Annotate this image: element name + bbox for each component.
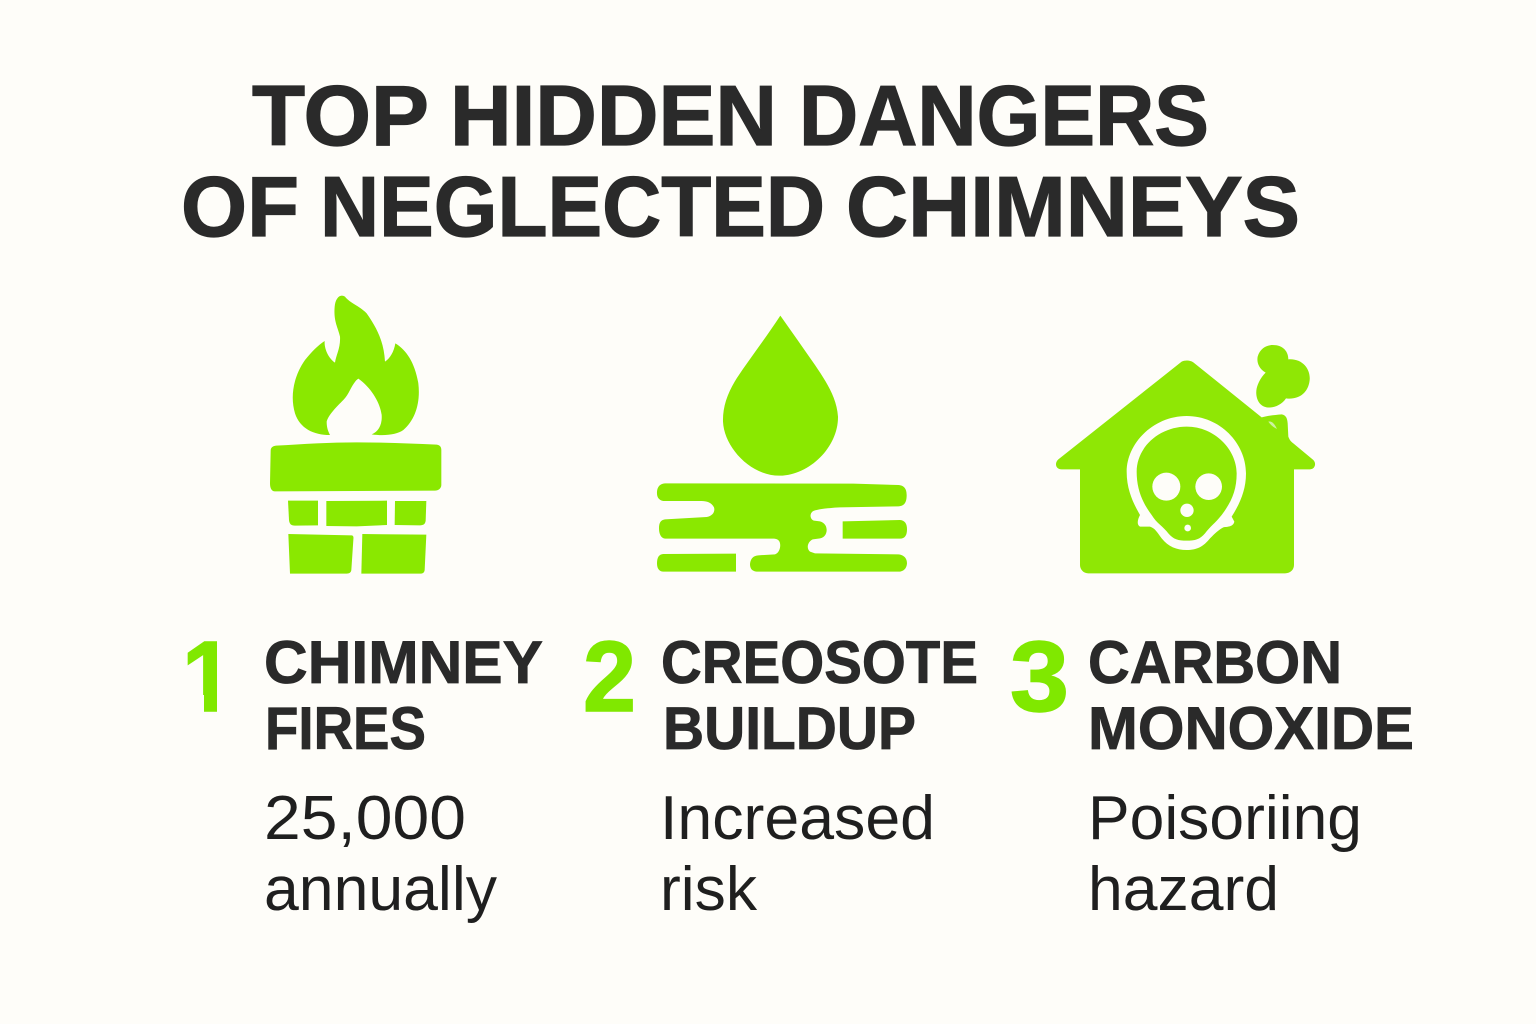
- title: TOP: [252, 69, 429, 164]
- text: poisoning hazard: hazard: [1088, 855, 1279, 924]
- icon: chimney fire: [270, 296, 441, 574]
- heading: chimney fires: [264, 629, 543, 762]
- text: increased risk: Increased: [660, 784, 935, 853]
- number 1: 1: [182, 621, 234, 733]
- icon: creosote drop and puddle: [657, 316, 907, 572]
- text: increased risk: [660, 784, 935, 924]
- number 3: 3: [1010, 621, 1069, 733]
- heading: carbon monoxide: MONOXIDE: [1088, 695, 1414, 762]
- heading: chimney fires: CHIMNEY: [264, 629, 543, 696]
- title: DANGERS: [799, 69, 1209, 164]
- title: OF: [181, 160, 299, 255]
- item 1: chimney fires: [182, 621, 543, 924]
- item 2: creosote buildup: [583, 621, 978, 924]
- heading: carbon monoxide: CARBON: [1088, 629, 1342, 696]
- icon: house with skull and smoke: [1056, 345, 1315, 573]
- heading: creosote buildup: BUILDUP: [663, 695, 916, 762]
- text: poisoning hazard: Poisoriing: [1088, 784, 1362, 853]
- heading: carbon monoxide: [1088, 629, 1414, 762]
- text: poisoning hazard: [1088, 784, 1362, 924]
- title: NEGLECTED: [320, 160, 825, 255]
- heading: chimney fires: FIRES: [265, 695, 426, 762]
- stat: 25,000 annually: annually: [264, 855, 497, 924]
- item 3: carbon monoxide: [1010, 621, 1414, 924]
- number 2: 2: [583, 621, 636, 733]
- stat: 25,000 annually: [264, 784, 497, 924]
- heading: creosote buildup: CREOSOTE: [661, 629, 978, 696]
- title: CHIMNEYS: [846, 160, 1300, 255]
- title: [181, 69, 1300, 255]
- title: HIDDEN: [450, 69, 777, 164]
- stat: 25,000 annually: 25,000: [264, 784, 466, 853]
- heading: creosote buildup: [661, 629, 978, 762]
- text: increased risk: risk: [660, 855, 758, 924]
